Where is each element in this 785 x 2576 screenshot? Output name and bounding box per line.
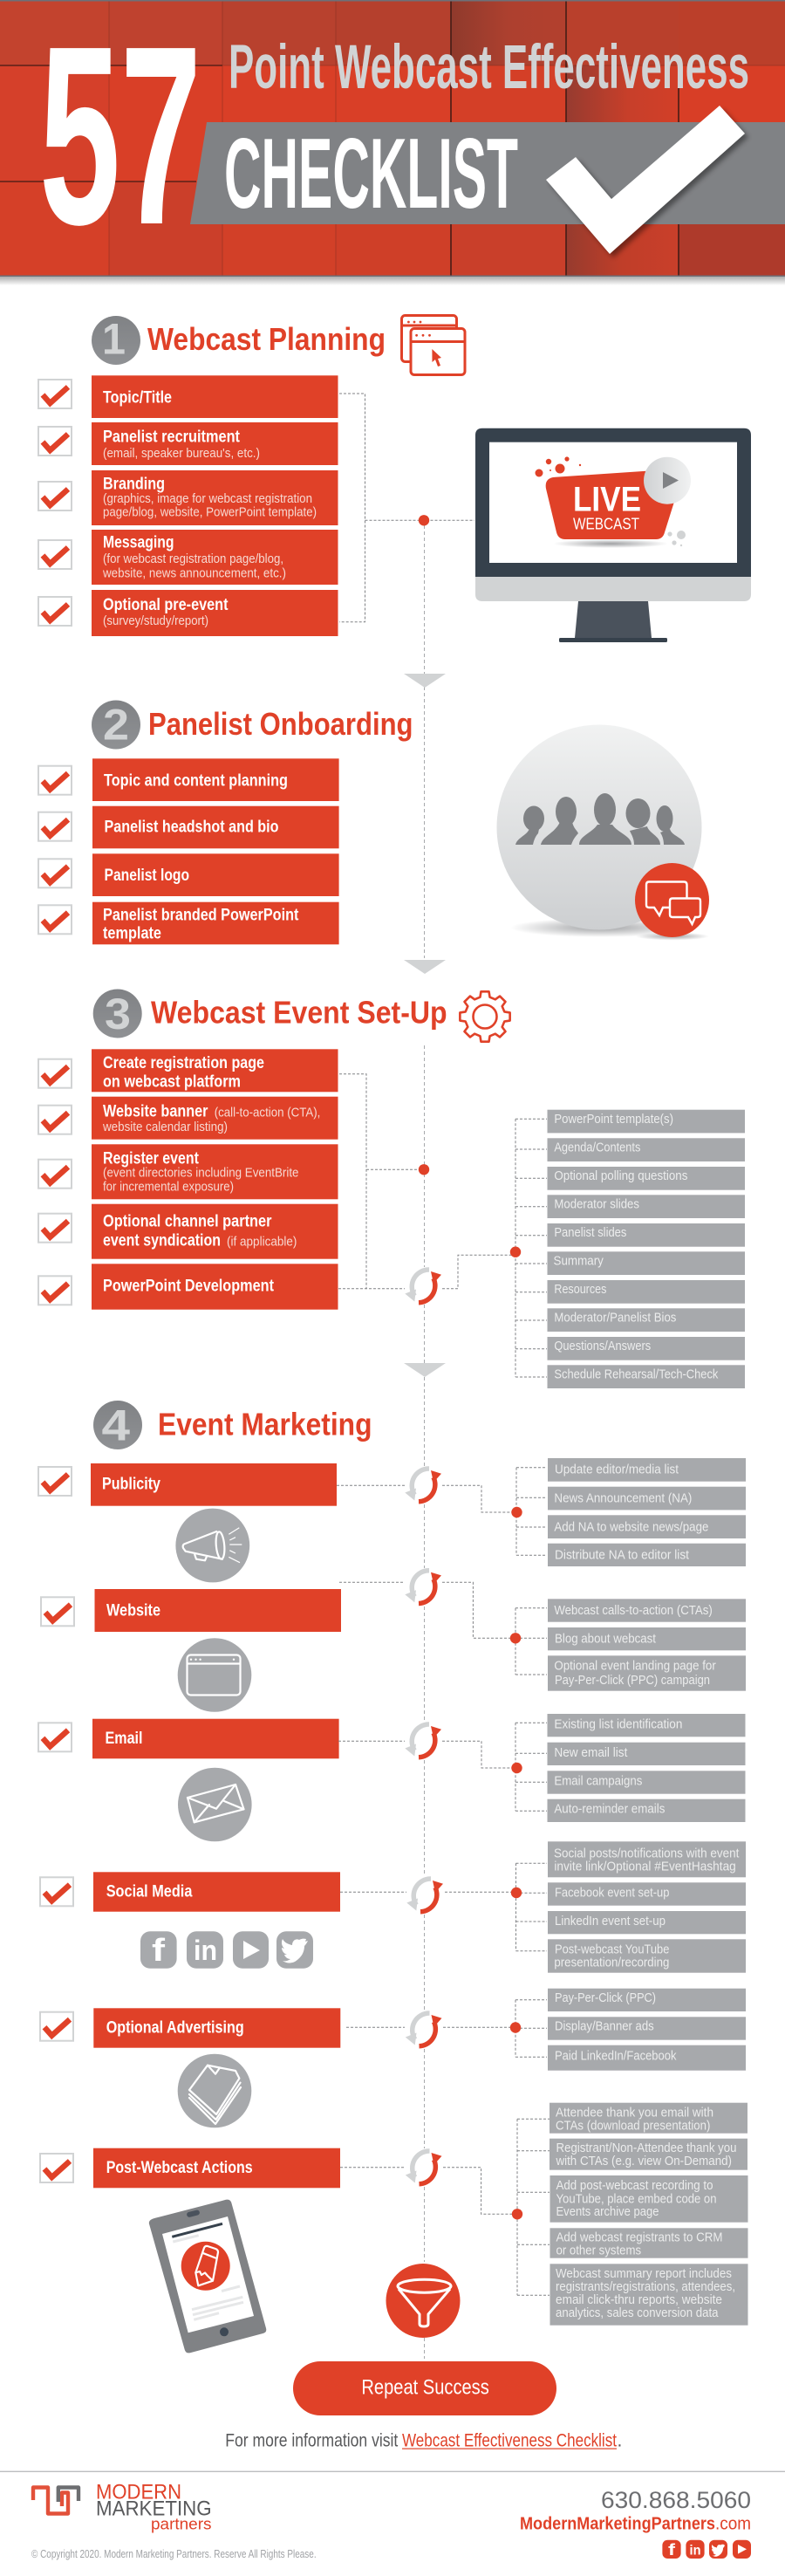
central timeline: [404, 525, 446, 2359]
item: Create registration page on webcast platform: on webcast platform: [103, 1072, 241, 1091]
checkbox 2.1: [38, 766, 72, 795]
more information line: Webcast Effectiveness Checklist: [402, 2430, 617, 2450]
item: Post-Webcast Actions: Post-Webcast Actions: [106, 2159, 253, 2177]
item: Optional Advertising: [93, 2008, 340, 2048]
connector: planning to monitor: [339, 394, 474, 622]
icon: cycle arrows: [406, 2013, 441, 2046]
illustration: live webcast monitor: [475, 428, 751, 642]
connectors: website: [339, 1582, 547, 1675]
item: Optional channel partner event syndication: event syndication: [103, 1231, 221, 1250]
list: post-webcast tasks: Add webcast registrants to CRM: [556, 2230, 722, 2244]
icon: cycle arrows: [405, 1571, 441, 1604]
item: Social Media: Social Media: [106, 1882, 193, 1901]
play button: [644, 457, 691, 504]
list: post-webcast tasks: YouTube, place embed code on: [556, 2191, 717, 2206]
list: post-webcast tasks: or other systems: [556, 2243, 641, 2257]
checkbox: Post-Webcast Actions: [40, 2154, 73, 2182]
item: Topic/Title: Topic/Title: [103, 389, 172, 408]
live badge: LIVE: [573, 481, 641, 519]
list: post-webcast tasks: [550, 2103, 748, 2326]
section 3: Webcast Event Set-Up: [38, 990, 745, 1388]
icon: megaphone: [175, 1509, 249, 1582]
item: Create registration page on webcast platform: [92, 1049, 338, 1092]
list: website tasks: Pay-Per-Click (PPC) campaign: [555, 1673, 710, 1688]
item: Branding: [92, 470, 338, 525]
item: Panelist branded PowerPoint template: Panelist branded PowerPoint: [103, 907, 299, 925]
item: Website: [94, 1589, 341, 1632]
icon: funnel: [386, 2264, 461, 2338]
logo wordmark: MODERN: [96, 2480, 181, 2504]
step number 1: [92, 314, 140, 365]
checkbox 3.4: [38, 1214, 72, 1243]
list: PowerPoint contents: Moderator slides: [554, 1196, 639, 1211]
title line: CHECKLIST: CHECKLIST: [224, 119, 518, 230]
item: Website banner: (call-to-action (CTA),: [215, 1105, 320, 1120]
list: post-webcast tasks: registrants/registrations, attendees,: [556, 2279, 735, 2294]
list: post-webcast tasks: Events archive page: [556, 2204, 659, 2219]
step number 1: 1: [102, 314, 126, 363]
logo wordmark: partners: [151, 2515, 211, 2532]
checkbox 2.4: [38, 905, 72, 934]
item: Post-Webcast Actions: [93, 2148, 340, 2188]
item: Panelist headshot and bio: Panelist headshot and bio: [105, 819, 279, 837]
connectors: email: [338, 1723, 547, 1811]
icon: cycle arrows: [406, 2151, 441, 2184]
list: social media tasks: presentation/recording: [554, 1955, 669, 1970]
header banner: [0, 0, 785, 285]
icon: large check mark: [546, 106, 748, 257]
item: Register event: Register event: [103, 1149, 200, 1168]
item: Email: [92, 1719, 339, 1758]
list: post-webcast tasks: with CTAs (e.g. view On-Demand): [556, 2154, 732, 2168]
website: ModernMarketingPartners: [520, 2514, 715, 2533]
list: post-webcast tasks: Add post-webcast recording to: [556, 2178, 713, 2193]
item: Optional channel partner event syndication: [92, 1204, 338, 1259]
list: social media tasks: [548, 1841, 746, 1973]
list: post-webcast tasks: CTAs (download presentation): [556, 2119, 710, 2134]
phone number: 630.868.5060: [601, 2487, 751, 2513]
checkbox 1.1: [38, 380, 72, 408]
item: PowerPoint Development: PowerPoint Development: [103, 1277, 275, 1295]
list: social media tasks: Facebook event set-up: [555, 1885, 669, 1900]
website: .com: [715, 2514, 751, 2533]
list: PowerPoint contents: Questions/Answers: [554, 1339, 651, 1353]
item: Branding: page/blog, website, PowerPoint template): [103, 505, 317, 520]
item: Publicity: [91, 1463, 337, 1506]
live badge: [546, 470, 674, 539]
list: PowerPoint contents: PowerPoint template(s): [554, 1112, 673, 1127]
list: PowerPoint contents: Optional polling questions: [554, 1168, 687, 1183]
checkbox 1.3: [38, 482, 72, 510]
step number 2: [92, 700, 140, 749]
item: Messaging: [92, 530, 338, 585]
item: Panelist branded PowerPoint template: template: [103, 925, 161, 943]
icons: social networks: in: [194, 1935, 217, 1966]
item: Social Media: [93, 1872, 340, 1912]
big number 57: 57: [39, 0, 201, 277]
icons: social networks: [140, 1931, 313, 1969]
item: Create registration page on webcast platform: Create registration page: [103, 1054, 264, 1072]
checkbox 2.3: [38, 859, 72, 887]
list: email tasks: Existing list identification: [554, 1716, 682, 1731]
checkbox 1.4: [38, 540, 72, 569]
list: website tasks: Webcast calls-to-action (CTAs): [554, 1603, 713, 1618]
checkbox: Website: [41, 1597, 74, 1626]
item: Messaging: website, news announcement, etc.): [102, 565, 286, 580]
list: PowerPoint contents: Agenda/Contents: [554, 1140, 640, 1155]
list: PowerPoint contents: [548, 1110, 745, 1388]
list: website tasks: Blog about webcast: [555, 1632, 657, 1647]
connectors: publicity: [337, 1468, 547, 1555]
list: post-webcast tasks: Registrant/Non-Attendee thank you: [556, 2141, 736, 2155]
step number 3: [93, 990, 142, 1038]
logo mark: [33, 2487, 78, 2513]
list: email tasks: New email list: [554, 1745, 628, 1760]
item: Publicity: Publicity: [102, 1476, 160, 1494]
more information line: For more information visit: [225, 2430, 398, 2450]
icon: chat bubbles: [635, 863, 709, 937]
checkbox: Optional Advertising: [40, 2012, 73, 2041]
item: PowerPoint Development: [92, 1264, 338, 1310]
step number 4: [93, 1401, 142, 1450]
icon: browser windows: [401, 316, 465, 375]
list: publicity tasks: Add NA to website news/page: [554, 1519, 708, 1534]
live badge: WEBCAST: [573, 516, 639, 533]
icon: gear: [460, 991, 510, 1042]
icon: cycle arrows: [406, 1879, 443, 1912]
section 4: Event Marketing: [38, 1401, 748, 2353]
list: advertising tasks: [548, 1989, 746, 2071]
list: website tasks: Optional event landing page for: [554, 1658, 716, 1673]
section 2: Panelist Onboarding: [38, 700, 709, 944]
list: social media tasks: LinkedIn event set-up: [555, 1914, 666, 1929]
connectors: advertising: [346, 2000, 547, 2057]
item: Register event: [92, 1144, 338, 1199]
list: publicity tasks: News Announcement (NA): [554, 1490, 692, 1505]
heading: Event Marketing: Event Marketing: [158, 1407, 372, 1442]
item: Panelist logo: [92, 853, 339, 896]
list: PowerPoint contents: Resources: [554, 1282, 606, 1297]
list: publicity tasks: Distribute NA to editor list: [555, 1547, 690, 1562]
icon: panelist silhouettes: [515, 793, 685, 845]
icon: browser window: [178, 1638, 251, 1712]
checkbox 3.1: [38, 1059, 72, 1088]
list: email tasks: Auto-reminder emails: [554, 1802, 665, 1817]
more information line: .: [618, 2430, 622, 2450]
footer social icons: [662, 2540, 751, 2559]
checkbox 1.5: [38, 597, 72, 626]
item: Optional channel partner event syndication: Optional channel partner: [103, 1213, 272, 1231]
illustration: panelists globe: [497, 724, 709, 941]
list: post-webcast tasks: analytics, sales conversion data: [556, 2305, 719, 2320]
list: publicity tasks: [548, 1458, 746, 1566]
checkbox: Social Media: [40, 1877, 73, 1906]
list: PowerPoint contents: Schedule Rehearsal/Tech-Check: [554, 1367, 719, 1382]
item: Messaging: (for webcast registration page/blog,: [103, 552, 283, 566]
icon: cycle arrows: [405, 1270, 441, 1303]
item: Panelist headshot and bio: [92, 806, 339, 848]
list: advertising tasks: Display/Banner ads: [555, 2019, 654, 2034]
heading: Webcast Planning: Webcast Planning: [147, 321, 386, 357]
heading: Webcast Event Set-Up: Webcast Event Set-Up: [151, 995, 447, 1031]
item: Messaging: Messaging: [103, 534, 174, 552]
checkbox 2.2: [38, 812, 72, 841]
checkbox 3.5: [38, 1276, 72, 1305]
step number 4: 4: [101, 1401, 130, 1450]
section 1: Webcast Planning: [38, 314, 751, 642]
icon: cycle arrows: [405, 1469, 441, 1502]
checkbox: Publicity: [38, 1467, 72, 1496]
item: Optional pre-event: Optional pre-event: [103, 596, 229, 614]
list: website tasks: [548, 1599, 746, 1691]
item: Optional channel partner event syndication: (if applicable): [227, 1234, 297, 1249]
item: Topic and content planning: [92, 758, 339, 801]
footer social icons: in: [689, 2543, 701, 2559]
item: Branding: Branding: [103, 476, 165, 494]
checkbox: Email: [38, 1723, 72, 1751]
list: PowerPoint contents: Summary: [553, 1253, 604, 1269]
list: advertising tasks: Pay-Per-Click (PPC): [555, 1990, 656, 2005]
list: advertising tasks: Paid LinkedIn/Facebook: [555, 2049, 677, 2064]
item: Optional pre-event: (survey/study/report): [103, 613, 208, 628]
icon: cycle arrows: [405, 1724, 441, 1757]
footer: [0, 2471, 785, 2560]
list: social media tasks: Social posts/notifications with event: [554, 1846, 740, 1861]
item: Website: Website: [106, 1601, 160, 1620]
item: Panelist recruitment: Panelist recruitment: [103, 428, 241, 447]
list: publicity tasks: Update editor/media list: [555, 1462, 679, 1476]
list: social media tasks: invite link/Optional #EventHashtag: [554, 1860, 736, 1874]
logo wordmark: MARKETING: [96, 2497, 212, 2521]
copyright: © Copyright 2020. Modern Marketing Partners. Reserve All Rights Please.: [31, 2548, 317, 2560]
item: Panelist branded PowerPoint template: [92, 902, 339, 944]
icon: envelope: [178, 1768, 252, 1841]
list: email tasks: Email campaigns: [554, 1773, 642, 1788]
icons: social networks: f: [152, 1932, 166, 1968]
item: Website banner: [92, 1097, 338, 1140]
illustration: tablet with pencil: [149, 2200, 266, 2353]
footer social icons: f: [668, 2541, 676, 2559]
list: post-webcast tasks: Webcast summary report includes: [556, 2266, 732, 2281]
item: Register event: for incremental exposure): [103, 1179, 234, 1194]
item: Website banner: Website banner: [103, 1102, 208, 1120]
checkbox 3.3: [38, 1160, 72, 1189]
item: Optional Advertising: Optional Advertising: [106, 2018, 244, 2037]
list: social media tasks: Post-webcast YouTube: [555, 1942, 669, 1956]
list: post-webcast tasks: Attendee thank you email with: [556, 2105, 713, 2120]
connectors: event set-up: [338, 1074, 547, 1377]
item: Topic and content planning: Topic and content planning: [104, 772, 288, 791]
logo wordmark: [96, 2480, 212, 2532]
connectors: social media: [340, 1863, 547, 1951]
item: Website banner: website calendar listing): [102, 1120, 228, 1134]
item: Email: Email: [105, 1730, 143, 1748]
button: Repeat Success: [293, 2361, 556, 2415]
list: email tasks: [548, 1714, 745, 1822]
icon: paper stack: [178, 2054, 251, 2127]
item: Panelist logo: Panelist logo: [105, 867, 189, 885]
item: Optional pre-event: [92, 590, 338, 636]
item: Panelist recruitment: [92, 422, 338, 465]
item: Register event: (event directories including EventBrite: [103, 1166, 298, 1181]
gray title band: [190, 122, 785, 224]
more information line: [225, 2430, 622, 2450]
checkbox 3.2: [38, 1106, 72, 1134]
list: PowerPoint contents: Moderator/Panelist Bios: [554, 1311, 676, 1325]
item: Branding: (graphics, image for webcast registration: [103, 491, 312, 506]
item: Topic/Title: [92, 375, 338, 418]
heading: Panelist Onboarding: Panelist Onboarding: [148, 706, 413, 742]
item: Panelist recruitment: (email, speaker bureau's, etc.): [103, 446, 260, 461]
step number 3: 3: [105, 990, 131, 1038]
connectors: post-webcast: [340, 2119, 550, 2295]
list: post-webcast tasks: email click-thru reports, website: [556, 2292, 722, 2307]
checkbox 1.2: [38, 427, 72, 456]
button: Repeat Success: Repeat Success: [361, 2375, 489, 2399]
step number 2: 2: [103, 700, 129, 749]
list: PowerPoint contents: Panelist slides: [554, 1225, 626, 1240]
